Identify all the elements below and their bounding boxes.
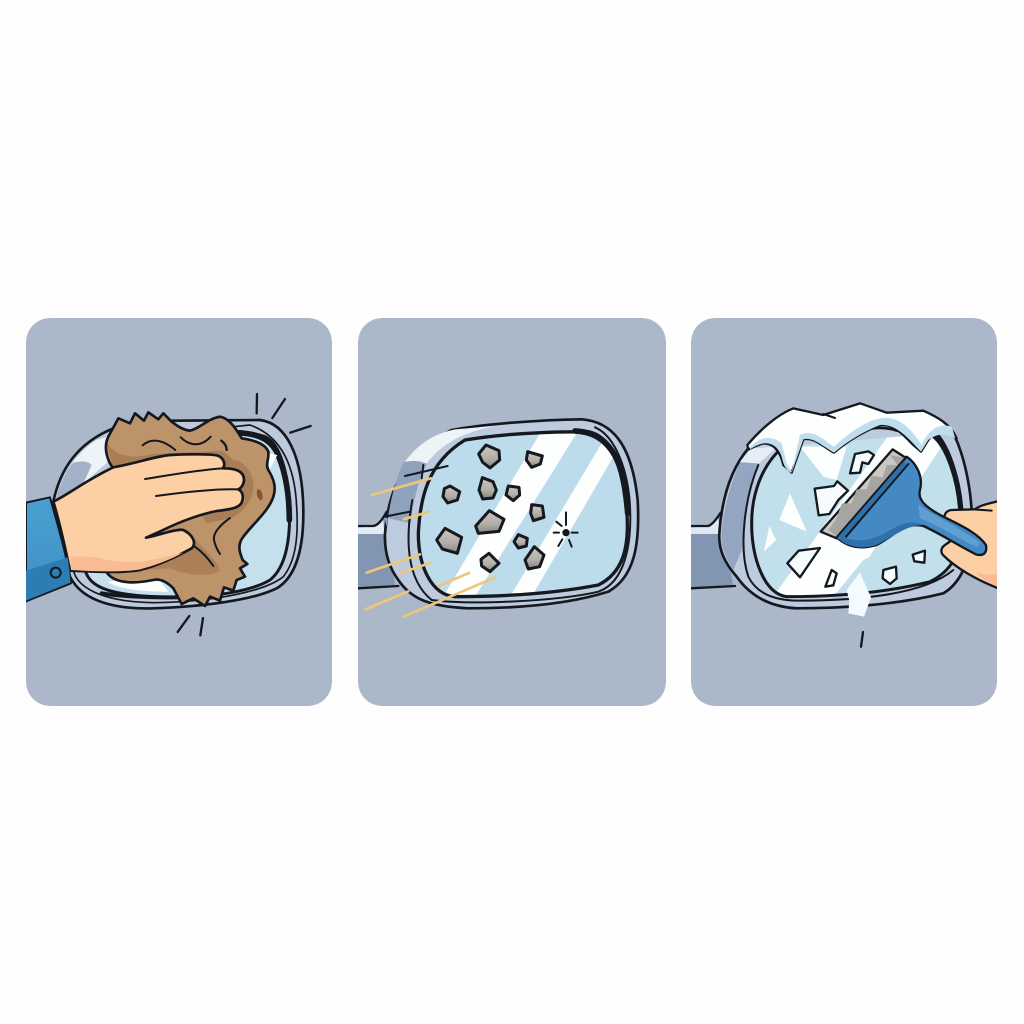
cloth crease top right: [181, 437, 211, 444]
rough brown cloth: [106, 412, 275, 606]
glass glare: [108, 580, 168, 592]
black frame: [752, 433, 962, 597]
blue shirt sleeve: [26, 497, 71, 601]
cloth crease lower: [214, 518, 230, 554]
frame thick bottom: [102, 593, 177, 597]
cloth crease mark: [221, 441, 227, 450]
frame thick right: [933, 435, 961, 508]
housing shadow: [55, 461, 92, 501]
mirror with cloth and hand: [26, 394, 311, 635]
mirror arm: [690, 513, 733, 588]
illustration: three mirror care panels: [26, 318, 997, 706]
gripping hand: [941, 501, 1000, 590]
upper finger line: [973, 509, 992, 511]
scraper body highlight: [918, 505, 981, 547]
scraper body shade: [837, 523, 923, 547]
mirror arm: [358, 518, 395, 588]
scraper blade: [821, 449, 907, 538]
inner rim: [744, 465, 953, 601]
cuff button: [51, 568, 61, 578]
cloth shading top: [107, 443, 254, 523]
ice chips on glass: [787, 451, 925, 587]
glass light patches: [833, 537, 943, 597]
housing shadow: [721, 463, 758, 570]
scraper lip: [846, 464, 908, 537]
sleeve cuff shade: [26, 557, 70, 601]
scraper lip highlight: [838, 462, 907, 538]
snow crease: [823, 414, 835, 418]
frame thick right: [237, 433, 289, 520]
frame thick top: [865, 428, 897, 431]
glass glare right: [268, 453, 277, 470]
panel background: [691, 318, 997, 706]
yellow speed lines: [366, 478, 494, 617]
mirror glass: [418, 432, 627, 597]
snow shadow: [750, 418, 955, 473]
panel: rubbing mirror with dirty cloth: [26, 318, 332, 706]
panel: stones hitting mirror: [355, 318, 666, 706]
housing highlight: [405, 426, 495, 463]
cloth stain: [256, 489, 263, 500]
mirror with ice and scraper: [690, 403, 1000, 647]
mirror rim: [73, 425, 297, 603]
panel background: [358, 318, 666, 706]
finger line two: [156, 489, 238, 496]
motion ticks bottom: [178, 616, 203, 635]
hand: [53, 454, 244, 572]
arm highlight: [691, 518, 720, 534]
glass frame: [418, 432, 627, 597]
arm outlines: [358, 512, 398, 588]
mirror with stones: [355, 419, 638, 617]
hand shadow: [71, 553, 183, 571]
ice scraper: [821, 449, 986, 555]
hand shadow: [975, 573, 998, 587]
panel background: [26, 318, 332, 706]
impact crack mark: [554, 512, 578, 547]
motion ticks top right: [257, 394, 311, 433]
scraper body: [837, 457, 986, 555]
black frame and glass: [85, 432, 290, 597]
falling tick: [861, 632, 863, 647]
panel: scraping ice off mirror: [690, 318, 1000, 706]
cloth crease bottom: [195, 547, 213, 566]
ice chunk falling: [847, 573, 871, 617]
cloth shading lower: [146, 539, 220, 575]
inner rim: [409, 427, 630, 602]
frame thick right: [575, 431, 628, 513]
finger line one: [145, 468, 223, 479]
housing highlight: [55, 437, 108, 500]
housing highlight: [740, 447, 777, 464]
scraper teeth: [828, 455, 907, 536]
mirror glass: [752, 433, 962, 597]
glass white streaks: [764, 433, 950, 597]
mirror housing: [719, 425, 972, 608]
glass white stripes: [443, 432, 613, 597]
black arm crossing lines: [385, 465, 448, 517]
cloth crease top left: [143, 441, 175, 450]
arm highlight: [358, 520, 384, 534]
stones: [437, 445, 544, 572]
housing shadow: [384, 461, 427, 527]
mirror housing: [385, 419, 638, 608]
arm outlines: [691, 513, 735, 588]
mirror housing: [53, 420, 303, 608]
snow cap: [747, 403, 957, 473]
